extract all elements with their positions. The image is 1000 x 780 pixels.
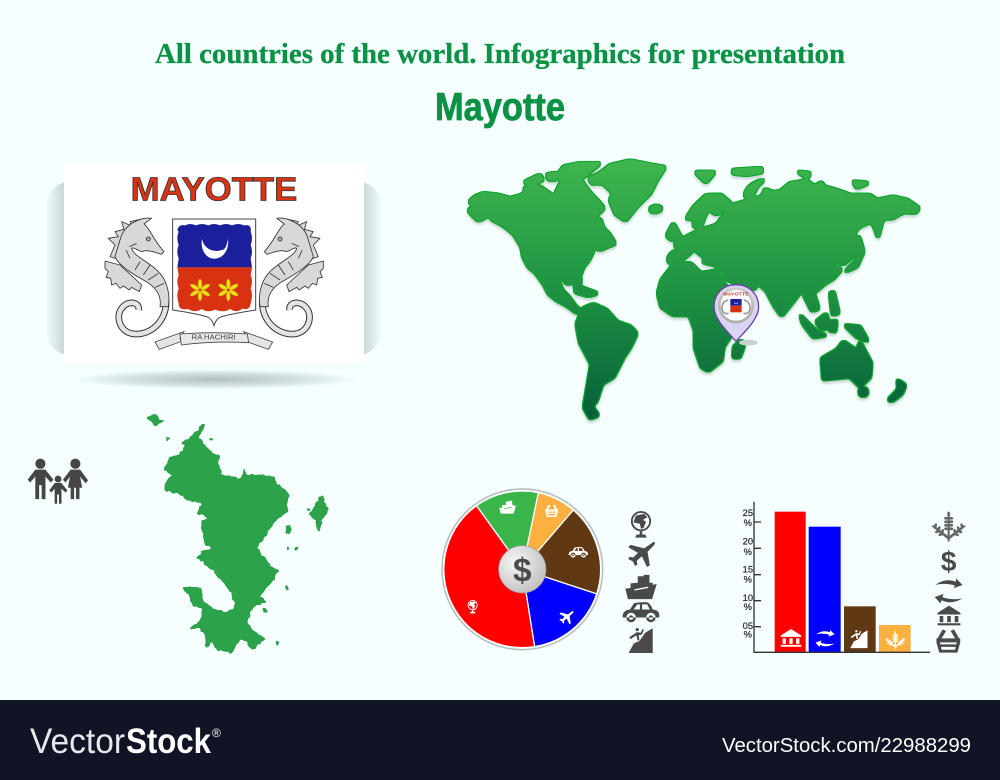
axis labels: %	[744, 602, 752, 612]
icon: white climber	[850, 630, 867, 648]
axis labels: 10	[743, 593, 753, 603]
icon: dark basket	[936, 629, 960, 653]
icon: dark globe	[631, 511, 651, 538]
icon: white plane	[559, 611, 573, 624]
icon: dark wheat	[931, 512, 966, 541]
icon: family	[28, 459, 88, 504]
icon: white basket	[545, 505, 558, 517]
icon: dark plane	[628, 542, 655, 567]
white flag field	[64, 163, 364, 363]
flag wordmark: MAYOTTE	[131, 172, 297, 209]
coat of arms shield	[173, 219, 256, 326]
icon: dark climber	[629, 628, 653, 653]
map pin: Mayotte	[714, 285, 759, 346]
footer logo	[30, 722, 221, 761]
pie slices	[444, 491, 601, 648]
axis labels	[743, 508, 753, 640]
Australia / NZ	[821, 341, 906, 402]
pie rim	[442, 489, 603, 650]
Petite-Terre and islets	[147, 414, 328, 646]
icon: dark exchange	[935, 579, 963, 603]
footer logo: Vector	[30, 722, 125, 761]
Eurasia	[667, 180, 920, 317]
icon: dark ship	[625, 575, 657, 599]
Greenland	[588, 160, 666, 221]
footer logo: Stock	[126, 722, 211, 761]
map of Mayotte	[147, 414, 328, 653]
seahorse right	[259, 218, 323, 334]
bars	[775, 512, 911, 652]
axis labels: %	[744, 575, 752, 585]
flag shadow panel	[47, 182, 381, 355]
icon: white car	[569, 547, 588, 558]
Africa	[657, 263, 744, 372]
axis labels: 25	[743, 508, 753, 518]
icon: white bank	[781, 629, 801, 647]
panel: Mayotte flag	[47, 163, 381, 389]
icon: dark dollar: $	[941, 546, 957, 577]
axis labels: 20	[743, 536, 753, 546]
North America	[467, 163, 616, 313]
icon: white exchange	[815, 630, 835, 647]
SE Asia islands	[799, 291, 869, 342]
icon: white ship	[499, 501, 516, 514]
Arctic islands	[523, 167, 871, 297]
chart: donut pie	[442, 489, 659, 653]
axis labels: %	[744, 547, 752, 557]
axis labels: %	[744, 518, 752, 528]
footer image id: VectorStock.com/22988299	[722, 735, 971, 757]
Madagascar	[733, 339, 745, 358]
footer logo: ®	[212, 726, 221, 740]
axis labels: 15	[743, 565, 753, 575]
title: All countries of the world. Infographics for presentation	[155, 39, 845, 70]
pie hub	[499, 546, 546, 593]
map pin: Mayotte: MAYOTTE	[723, 292, 749, 297]
icon: dark bank	[938, 606, 960, 625]
Japan	[842, 233, 864, 274]
ground shadow	[72, 369, 358, 389]
axis labels: 05	[743, 621, 753, 631]
motto banner: RA HACHIRI	[192, 333, 236, 342]
seahorse left	[105, 218, 169, 334]
heading: country name: Mayotte	[435, 86, 565, 129]
chart: bar chart	[743, 502, 966, 653]
Iceland / UK / Scandinavia	[666, 194, 732, 241]
axis labels: %	[744, 630, 752, 640]
motto banner	[155, 332, 273, 349]
icon: white globe	[468, 600, 478, 613]
icon: dark car	[623, 602, 659, 622]
main island	[164, 425, 291, 653]
South America	[576, 303, 637, 419]
footer bar	[0, 700, 1000, 780]
icon: white wheat	[885, 631, 906, 649]
pie hub: $	[513, 553, 532, 590]
axes	[754, 502, 930, 652]
world map	[467, 160, 920, 419]
